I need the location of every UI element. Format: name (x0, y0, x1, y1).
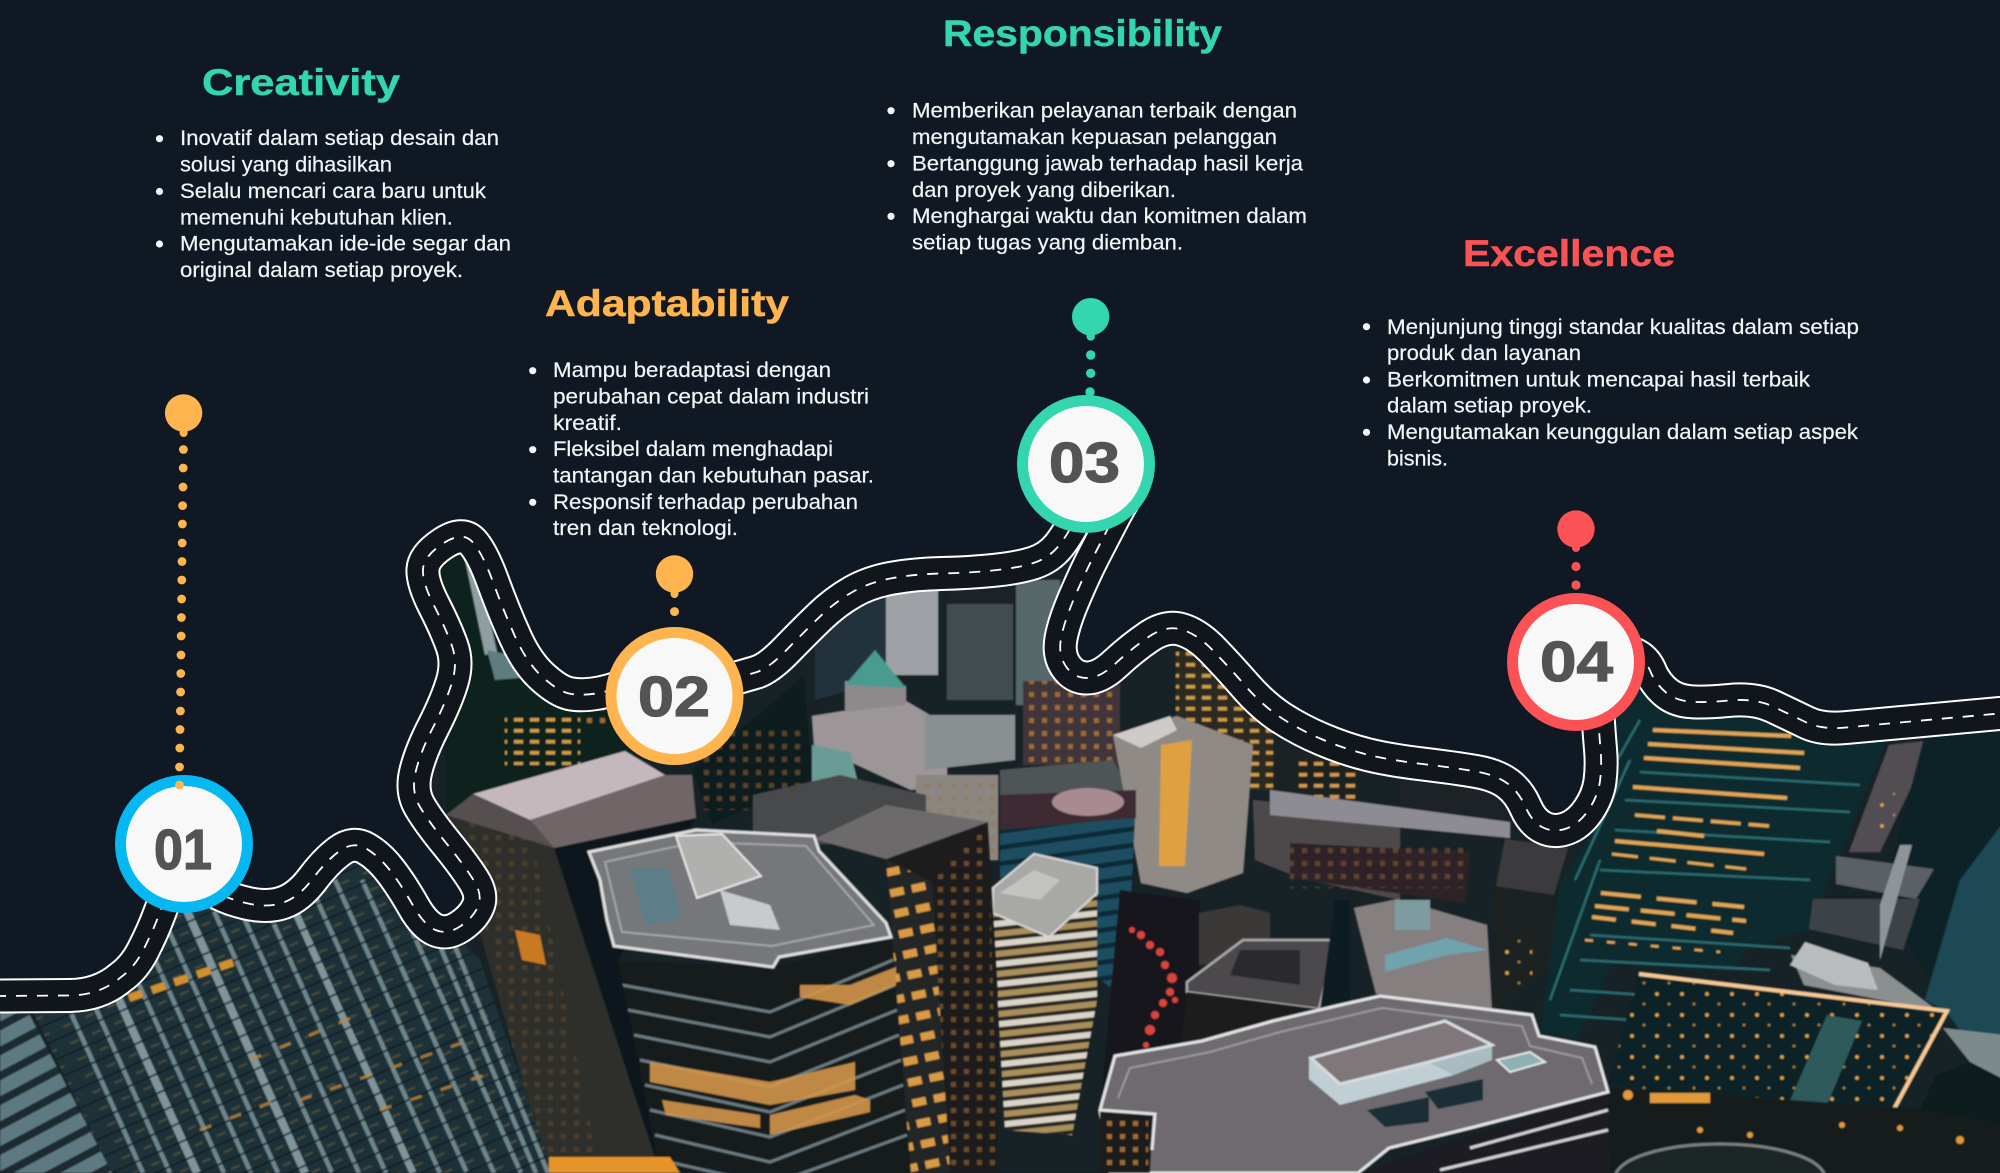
bullet list: excellence: Menjunjung tinggi standar kualitas dalam setiap (1387, 316, 1859, 339)
bullet list: adaptability (529, 359, 874, 540)
bullet list: adaptability: tantangan dan kebutuhan pasar. (553, 464, 874, 488)
bullet list: adaptability: kreatif. (553, 412, 622, 435)
heading: excellence: Excellence (1463, 233, 1675, 274)
marker 04 (1512, 598, 1640, 726)
pin 04 (1557, 510, 1595, 590)
bullet list: excellence: Berkomitmen untuk mencapai hasil terbaik (1387, 368, 1811, 392)
marker 03 (1022, 400, 1150, 528)
pin 03 (1072, 298, 1109, 397)
panel: creativity (156, 62, 511, 282)
bullet list: creativity: Inovatif dalam setiap desain dan (180, 127, 499, 150)
heading: responsibility: Responsibility (943, 13, 1222, 54)
bullet list: creativity: memenuhi kebutuhan klien. (180, 206, 453, 230)
marker 02 (611, 632, 738, 760)
bullet list: adaptability: Fleksibel dalam menghadapi (553, 438, 833, 461)
marker 04: 04 (1540, 630, 1613, 694)
bullet list: responsibility (887, 100, 1307, 254)
bullet list: creativity: original dalam setiap proyek. (180, 259, 463, 282)
bullet list: responsibility: Bertanggung jawab terhadap hasil kerja (912, 152, 1303, 176)
bullet list: creativity: Mengutamakan ide-ide segar dan (180, 232, 511, 256)
panel: adaptability (529, 283, 874, 540)
bullet list: excellence (1363, 316, 1859, 470)
bullet list: creativity (156, 127, 511, 282)
bullet list: creativity: solusi yang dihasilkan (180, 154, 392, 176)
panel: excellence (1363, 233, 1859, 470)
bullet list: creativity: Selalu mencari cara baru untuk (180, 180, 487, 203)
winding road (0, 488, 2000, 996)
bullet list: responsibility: mengutamakan kepuasan pelanggan (912, 126, 1277, 149)
marker 01 (120, 780, 248, 908)
bullet list: adaptability: Mampu beradaptasi dengan (553, 359, 831, 382)
bullet list: excellence: dalam setiap proyek. (1387, 394, 1592, 418)
pin 02 (656, 555, 693, 616)
bullet list: excellence: produk dan layanan (1387, 342, 1581, 365)
bullet list: responsibility: setiap tugas yang diemban. (912, 232, 1183, 254)
bullet list: adaptability: perubahan cepat dalam industri (553, 386, 869, 408)
bullet list: responsibility: Menghargai waktu dan komitmen dalam (912, 205, 1307, 228)
marker 02: 02 (638, 665, 710, 729)
marker 03: 03 (1049, 431, 1120, 495)
bullet list: excellence: bisnis. (1387, 448, 1448, 470)
bullet list: adaptability: Responsif terhadap perubahan (553, 491, 858, 514)
panel: responsibility (887, 13, 1307, 254)
bullet list: responsibility: Memberikan pelayanan terbaik dengan (912, 100, 1297, 122)
city photo (0, 500, 2000, 1173)
bullet list: excellence: Mengutamakan keunggulan dalam setiap aspek (1387, 421, 1859, 444)
heading: creativity: Creativity (202, 62, 400, 103)
heading: adaptability: Adaptability (545, 283, 789, 324)
bullet list: adaptability: tren dan teknologi. (553, 517, 738, 540)
pin and dotted line 01 (165, 394, 202, 789)
marker 01: 01 (154, 818, 212, 882)
bullet list: responsibility: dan proyek yang diberikan. (912, 179, 1176, 202)
